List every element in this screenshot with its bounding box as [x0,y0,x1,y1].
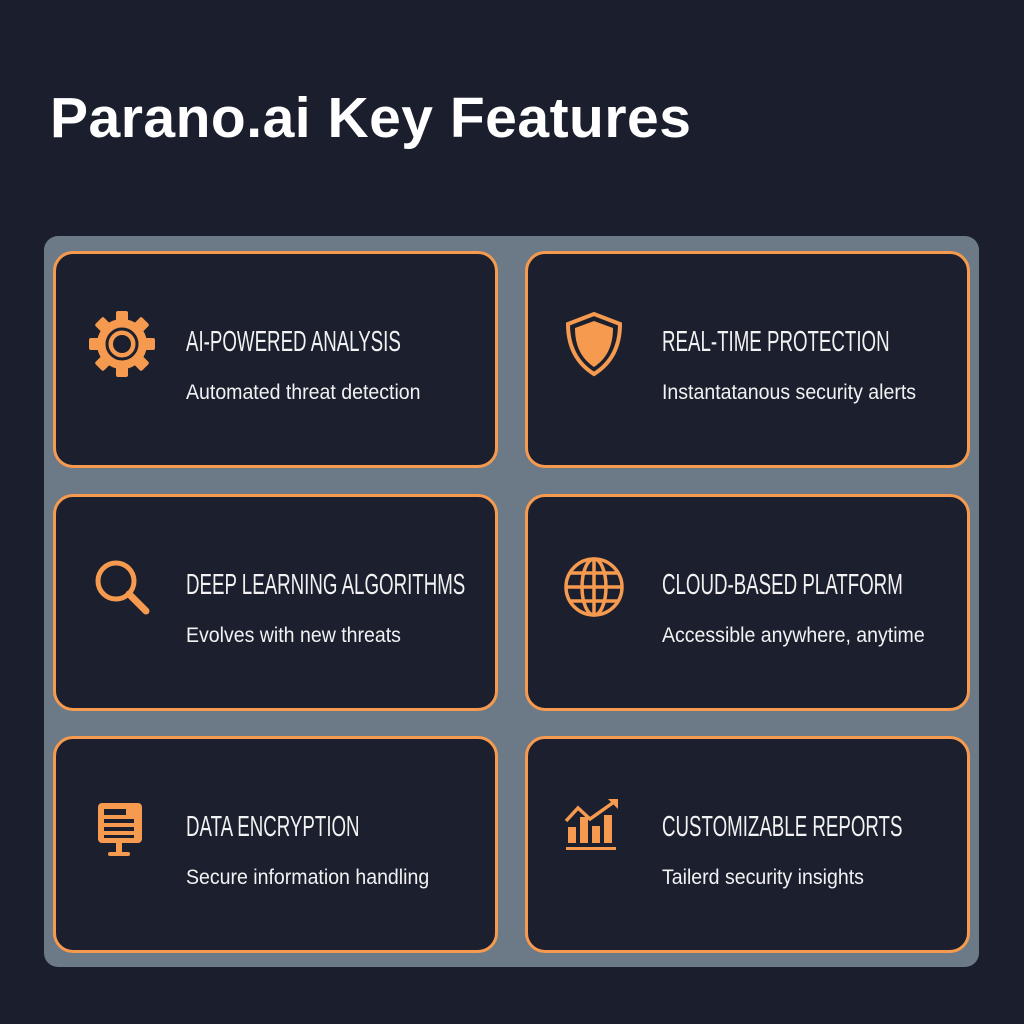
subtitle: Tailerd security insights [662,866,864,889]
panel: features grid [44,236,979,967]
card: data encryption [53,736,498,953]
heading: REAL-TIME PROTECTION [662,326,890,358]
title: Parano.ai Key Features [50,86,691,150]
card: AI-powered analysis [53,251,498,468]
card: real-time protection [525,251,970,468]
icon: shield [566,312,622,376]
icon: monitor [98,803,142,856]
card: cloud-based platform [525,494,970,711]
subtitle: Accessible anywhere, anytime [662,624,925,647]
icon: magnifier [96,560,150,614]
subtitle: Evolves with new threats [186,624,401,647]
heading: AI-POWERED ANALYSIS [186,326,401,358]
subtitle: Automated threat detection [186,381,421,404]
heading: DATA ENCRYPTION [186,811,360,843]
heading: CUSTOMIZABLE REPORTS [662,811,902,843]
subtitle: Secure information handling [186,866,429,889]
subtitle: Instantatanous security alerts [662,381,916,404]
icon: bar chart [564,799,618,850]
card: customizable reports [525,736,970,953]
icon: globe [564,557,624,617]
heading: DEEP LEARNING ALGORITHMS [186,569,465,601]
card: deep learning [53,494,498,711]
icon: gear [89,311,155,377]
heading: CLOUD-BASED PLATFORM [662,569,903,601]
